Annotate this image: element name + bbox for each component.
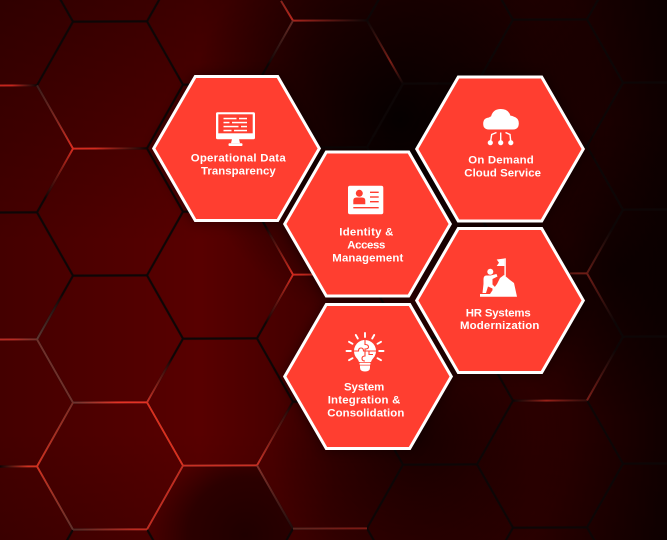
icon: computer monitor	[216, 112, 255, 146]
panel: HR Systems Modernization	[417, 228, 583, 372]
label: System Integration & Consolidation: System	[344, 382, 384, 394]
label: System Integration & Consolidation: Integration &	[328, 395, 400, 407]
label: Identity & Access Management: Access	[347, 240, 385, 252]
hexagon shadows	[152, 75, 585, 450]
panel: On Demand Cloud Service	[417, 77, 583, 221]
label: Operational Data Transparency	[191, 152, 286, 178]
label: Operational Data Transparency: Transparency	[201, 166, 276, 178]
label: Identity & Access Management: Identity &	[339, 227, 393, 239]
panel: Identity & Access Management	[285, 152, 450, 296]
label: HR Systems Modernization: HR Systems	[466, 307, 531, 319]
label: Operational Data Transparency: Operational Data	[191, 152, 286, 164]
label: Identity & Access Management: Management	[332, 253, 404, 265]
label: System Integration & Consolidation	[327, 382, 404, 420]
panel: Operational Data Transparency	[154, 76, 319, 220]
label: HR Systems Modernization: Modernization	[460, 320, 539, 332]
label: Identity & Access Management	[332, 227, 404, 265]
label: On Demand Cloud Service: On Demand	[468, 155, 534, 167]
label: System Integration & Consolidation: Consolidation	[327, 408, 404, 420]
icon: ID card	[348, 186, 383, 214]
icon: climber on mountain with flag	[480, 258, 517, 297]
label: HR Systems Modernization	[460, 307, 539, 332]
panel: System Integration & Consolidation	[285, 304, 451, 448]
icon: light bulb with puzzle pieces	[346, 333, 384, 372]
icon: cloud with circuits	[483, 109, 519, 145]
label: On Demand Cloud Service	[464, 155, 541, 180]
label: On Demand Cloud Service: Cloud Service	[464, 168, 541, 180]
